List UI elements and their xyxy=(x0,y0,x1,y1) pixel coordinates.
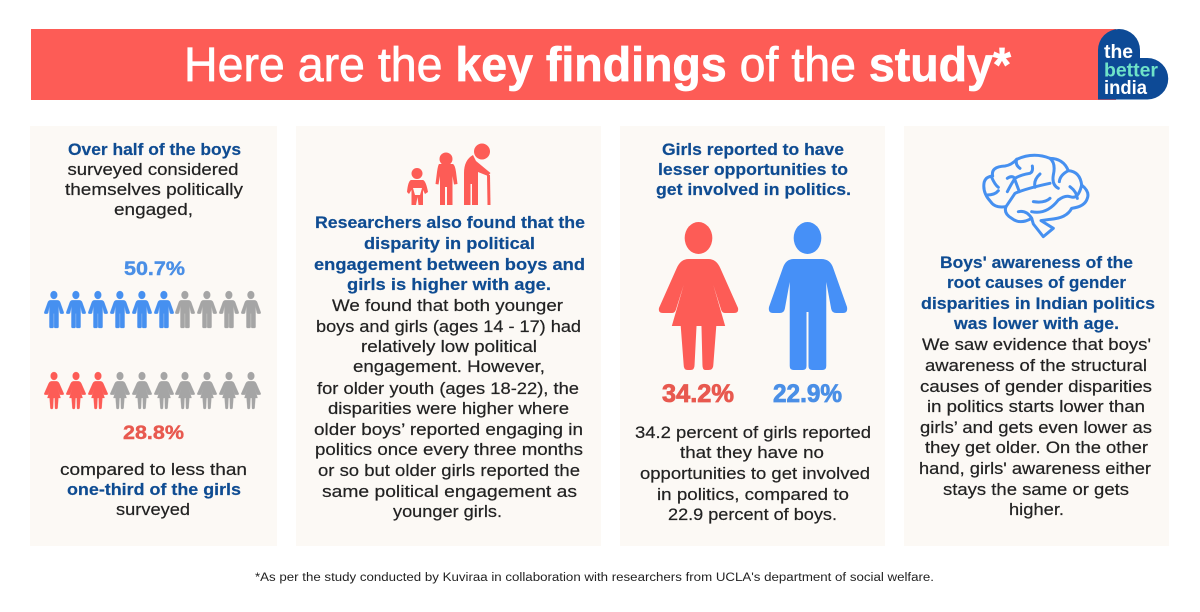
finding body text: they get older. On the other xyxy=(925,439,1149,457)
intro text: Over half of the boys xyxy=(68,141,241,159)
panel: opportunities in politics xyxy=(620,126,885,546)
title: Here are the key findings of the study* xyxy=(184,39,1011,92)
stat: boys 22.9%: 22.9% xyxy=(773,380,842,408)
logo: the better india: india xyxy=(1104,78,1147,99)
icon: brain xyxy=(984,155,1088,237)
finding body text: stays the same or gets xyxy=(943,481,1129,499)
finding heading: disparity in political xyxy=(364,235,535,253)
finding heading: Researchers also found that the xyxy=(315,214,585,232)
finding heading: lesser opportunities to xyxy=(658,161,848,179)
finding body text: older boys’ reported engaging in xyxy=(314,421,583,439)
finding body text: causes of gender disparities xyxy=(920,378,1152,396)
icon: girl xyxy=(659,222,738,370)
finding heading: disparities in Indian politics xyxy=(921,295,1155,313)
closing text: compared to less than xyxy=(60,461,247,479)
header banner xyxy=(31,29,1116,100)
finding heading: engagement between boys and xyxy=(314,256,585,274)
panel: awareness of root causes xyxy=(904,126,1169,546)
finding body text: in politics starts lower than xyxy=(927,398,1145,416)
finding body text: politics once every three months xyxy=(315,441,583,459)
pictogram: girls xyxy=(44,372,261,409)
finding heading xyxy=(314,214,585,294)
finding heading: Boys' awareness of the xyxy=(940,254,1133,272)
icon: child, youth and elder xyxy=(407,144,490,205)
finding heading xyxy=(921,254,1155,333)
finding heading xyxy=(656,141,851,199)
finding body text: girls’ and gets even lower as xyxy=(920,419,1152,437)
pictogram: boys xyxy=(44,291,261,328)
closing text: one-third of the girls xyxy=(67,481,241,499)
finding heading: girls is higher with age. xyxy=(347,276,551,294)
finding heading: root causes of gender xyxy=(947,274,1127,292)
intro text: surveyed considered xyxy=(68,161,238,179)
stat: girls 34.2%: 34.2% xyxy=(662,380,734,408)
icon: boy xyxy=(769,222,847,370)
finding body text: awareness of the structural xyxy=(925,357,1147,375)
finding body text: same political engagement as xyxy=(322,483,577,501)
intro text xyxy=(65,141,244,219)
finding body text: We saw evidence that boys' xyxy=(922,336,1151,354)
finding body text: in politics, compared to xyxy=(657,486,849,504)
intro text: themselves politically xyxy=(65,181,244,199)
finding body text: opportunities to get involved xyxy=(640,465,870,483)
finding body text: younger girls. xyxy=(393,503,502,521)
intro text: engaged, xyxy=(114,201,193,219)
logo: the better india xyxy=(1098,29,1168,100)
logo: the better india: better xyxy=(1104,60,1159,82)
finding body text: 34.2 percent of girls reported xyxy=(635,424,871,442)
finding body text xyxy=(314,297,583,521)
finding body text xyxy=(635,424,871,524)
finding body text: 22.9 percent of boys. xyxy=(668,506,837,524)
finding heading: was lower with age. xyxy=(953,315,1119,333)
finding body text: We found that both younger xyxy=(332,297,564,315)
finding heading: get involved in politics. xyxy=(656,181,851,199)
finding body text: hand, girls' awareness either xyxy=(919,460,1152,478)
finding body text: boys and girls (ages 14 - 17) had xyxy=(316,318,581,336)
finding body text xyxy=(919,336,1152,519)
logo: the better india: the xyxy=(1104,42,1133,63)
finding body text: or so but older girls reported the xyxy=(318,462,580,480)
panel: political engagement of boys and girls xyxy=(30,126,277,546)
footnote: *As per the study conducted by Kuviraa in collaboration with researchers from UCLA's department of social welfare. xyxy=(255,572,934,584)
finding heading: Girls reported to have xyxy=(662,141,844,159)
finding body text: higher. xyxy=(1009,501,1064,519)
finding body text: engagement. However, xyxy=(353,358,545,376)
closing text xyxy=(60,461,247,519)
panel: disparity grows with age xyxy=(296,126,601,546)
finding body text: that they have no xyxy=(680,444,824,462)
stat: girls 28.8%: 28.8% xyxy=(123,423,184,444)
finding body text: disparities were higher where xyxy=(328,400,569,418)
stat: boys 50.7%: 50.7% xyxy=(124,259,185,280)
closing text: surveyed xyxy=(116,501,190,519)
finding body text: relatively low political xyxy=(361,338,537,356)
finding body text: for older youth (ages 18-22), the xyxy=(317,380,579,398)
